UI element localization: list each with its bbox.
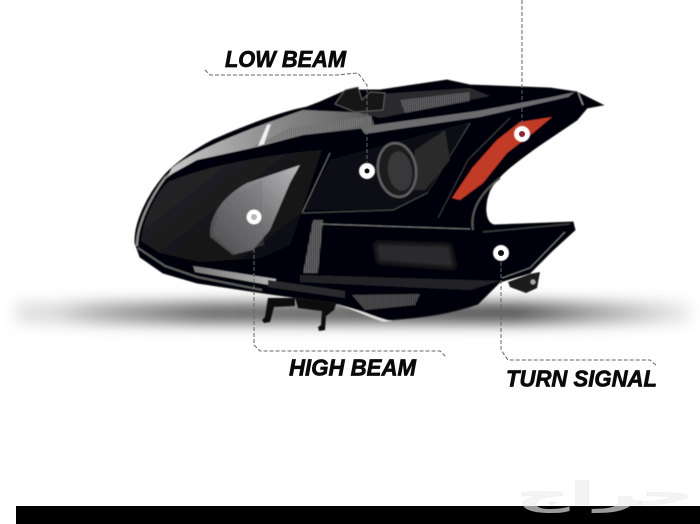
vertical hatch strip — [303, 220, 323, 273]
red turn marker — [452, 117, 552, 200]
lower bar highlights — [193, 266, 276, 286]
top mounting clip — [335, 87, 385, 112]
bottom black bar — [16, 506, 700, 524]
marker dot: high beam — [246, 210, 262, 224]
upper chrome strip right — [360, 92, 575, 134]
upper chrome strip — [168, 110, 375, 176]
right arm chrome edge — [472, 178, 500, 230]
projector housing — [305, 122, 470, 210]
marker dot: turn signal — [493, 245, 509, 261]
callout line: turn signal — [501, 262, 657, 366]
lower reflection — [375, 243, 455, 268]
callout line: high beam — [254, 225, 446, 357]
headlight assembly — [135, 80, 603, 331]
marker dot: side marker — [514, 126, 530, 142]
watermark: حراج — [516, 476, 694, 513]
left reflector — [210, 165, 300, 255]
left lens — [141, 150, 322, 262]
right mounting tab — [508, 272, 540, 293]
lower brackets — [262, 298, 338, 331]
marker surround line — [438, 118, 510, 218]
lens rim — [137, 170, 175, 246]
heading: high beam: HIGH BEAM — [289, 354, 417, 380]
bottom glare — [340, 306, 392, 322]
callout line: marker — [521, 0, 523, 126]
projector lens — [374, 141, 420, 199]
callout line: low beam — [205, 70, 367, 162]
ground shadow — [16, 302, 690, 324]
housing body — [135, 80, 603, 320]
heading: low beam: LOW BEAM — [225, 46, 347, 72]
heading: turn signal: TURN SIGNAL — [506, 366, 657, 392]
marker dot: low beam — [359, 163, 375, 179]
